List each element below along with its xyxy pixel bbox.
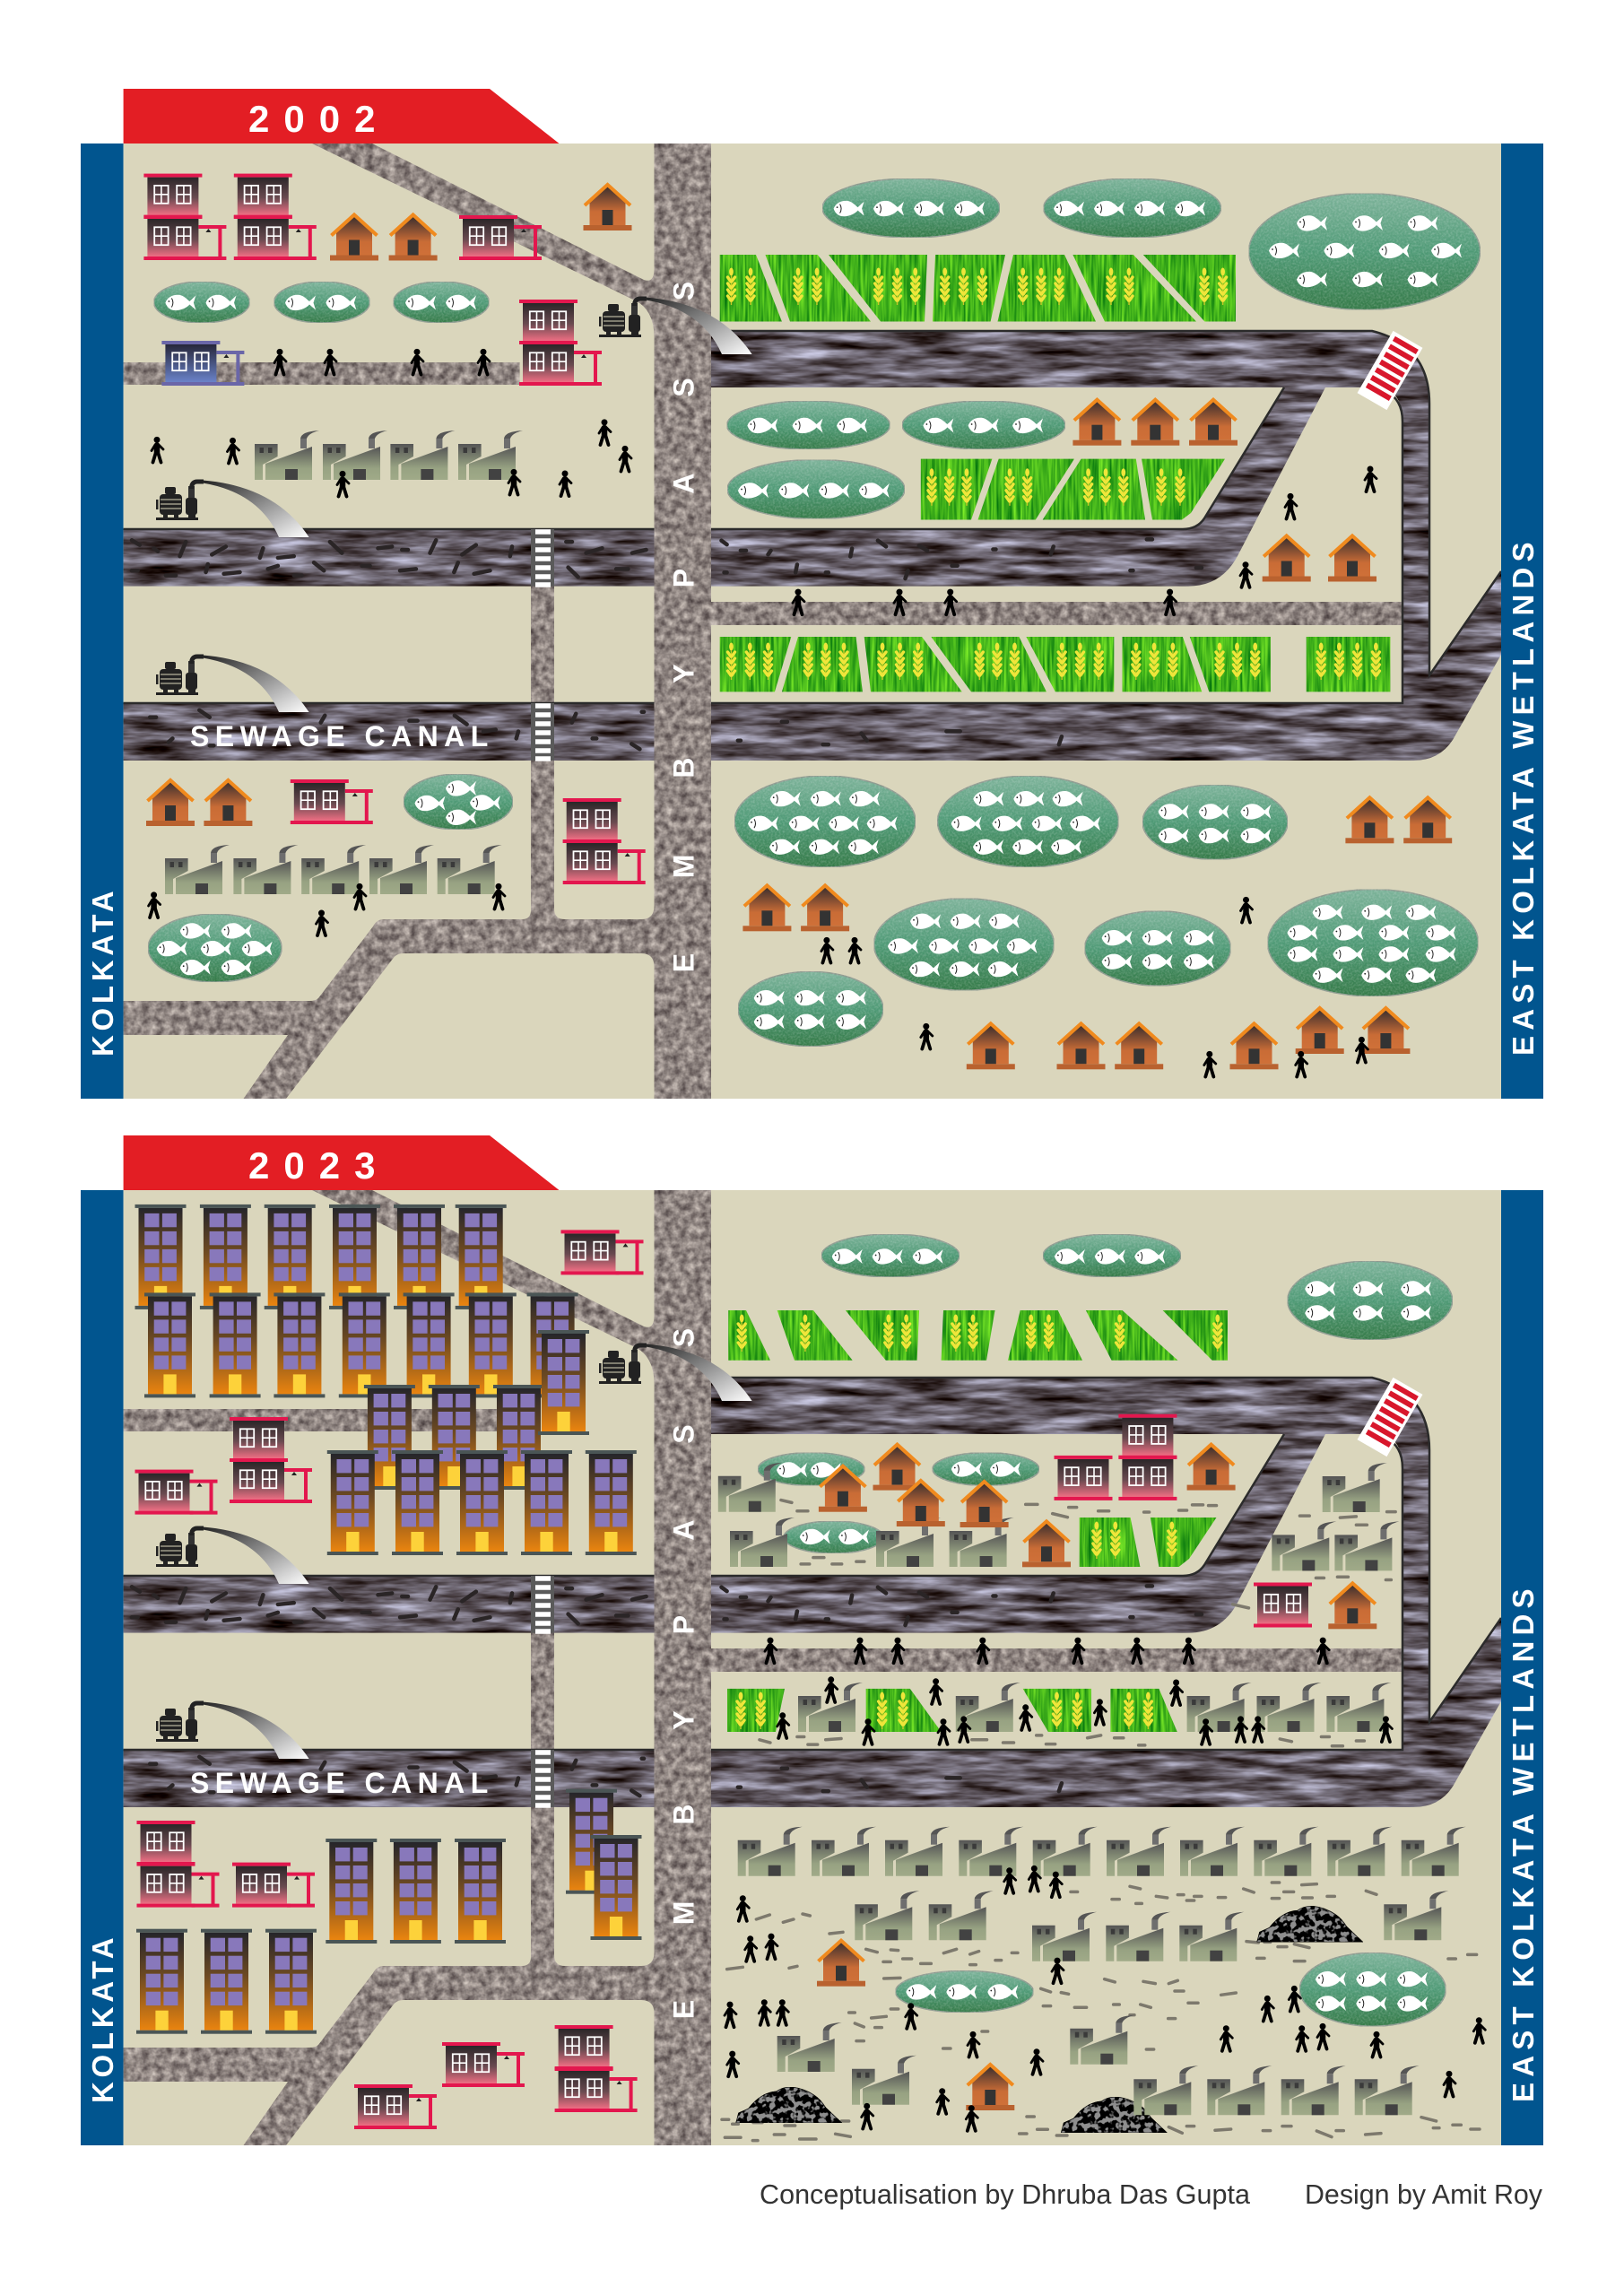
credits: Design by Amit Roy: [1305, 2179, 1542, 2210]
remaining wetland houses and small buildings: [817, 1414, 1376, 2110]
label: sewage canal: SEWAGE CANAL: [190, 720, 494, 752]
factories spreading over the wetland: [718, 1463, 1466, 2115]
sidebar: Kolkata: [81, 144, 124, 1099]
wetland fish ponds, south: [895, 1952, 1446, 2026]
heading: year 2023: 2023: [248, 1144, 389, 1187]
wetland fish ponds: [726, 178, 1481, 1047]
wetland people: [793, 466, 1376, 1076]
heading: year 2002: [124, 89, 560, 144]
credits: [760, 2179, 1542, 2210]
remaining fish ponds, north wetland: [758, 1234, 1453, 1553]
scattered debris on the wetland blocks: [722, 1500, 1480, 2141]
sidebar: East Kolkata Wetlands: EAST KOLKATA WETLANDS: [1507, 536, 1540, 1056]
wetland paddy fields: [720, 255, 1390, 691]
panel: 2023 map: [81, 1135, 1543, 2145]
credits: Conceptualisation by Dhruba Das Gupta: [760, 2179, 1251, 2210]
Kolkata small buildings, upper blocks: [135, 1230, 644, 1515]
label: Embypass road: EMBYPASS: [667, 282, 699, 972]
sidebar: Kolkata: KOLKATA: [86, 1934, 119, 2103]
shrinking paddy fields: [727, 1310, 1228, 1732]
Kolkata-side buildings and homes: [143, 174, 646, 884]
label: Embypass road: EMBYPASS: [667, 1328, 699, 2019]
Kolkata-side factories: [165, 430, 523, 894]
base map: roads, sewage canals, crossings and pumps: [124, 144, 1501, 1099]
panel: 2002 map: [81, 89, 1543, 1099]
heading: year 2002: 2002: [248, 98, 389, 140]
sidebar: Kolkata: [81, 1190, 124, 2145]
Kolkata-side fish ponds: [148, 282, 513, 982]
label: sewage canal: SEWAGE CANAL: [190, 1767, 494, 1799]
heading: year 2023: [124, 1135, 560, 1190]
sidebar: Kolkata: KOLKATA: [86, 887, 119, 1057]
Kolkata high-rise cluster: [135, 1205, 637, 1555]
Kolkata-side people: [149, 349, 631, 935]
wetland village houses: [743, 400, 1452, 1069]
Kolkata southern blocks: high-rises and small buildings: [136, 1789, 642, 2129]
sidebar: East Kolkata Wetlands: [1501, 1190, 1543, 2145]
sidebar: East Kolkata Wetlands: [1501, 144, 1543, 1099]
coal heaps: [736, 1906, 1363, 2133]
base map: roads, sewage canals, crossings and pumps: [124, 1190, 1501, 2145]
crowds of people in the wetland: [725, 1638, 1485, 2131]
sidebar: East Kolkata Wetlands: EAST KOLKATA WETLANDS: [1507, 1583, 1540, 2102]
